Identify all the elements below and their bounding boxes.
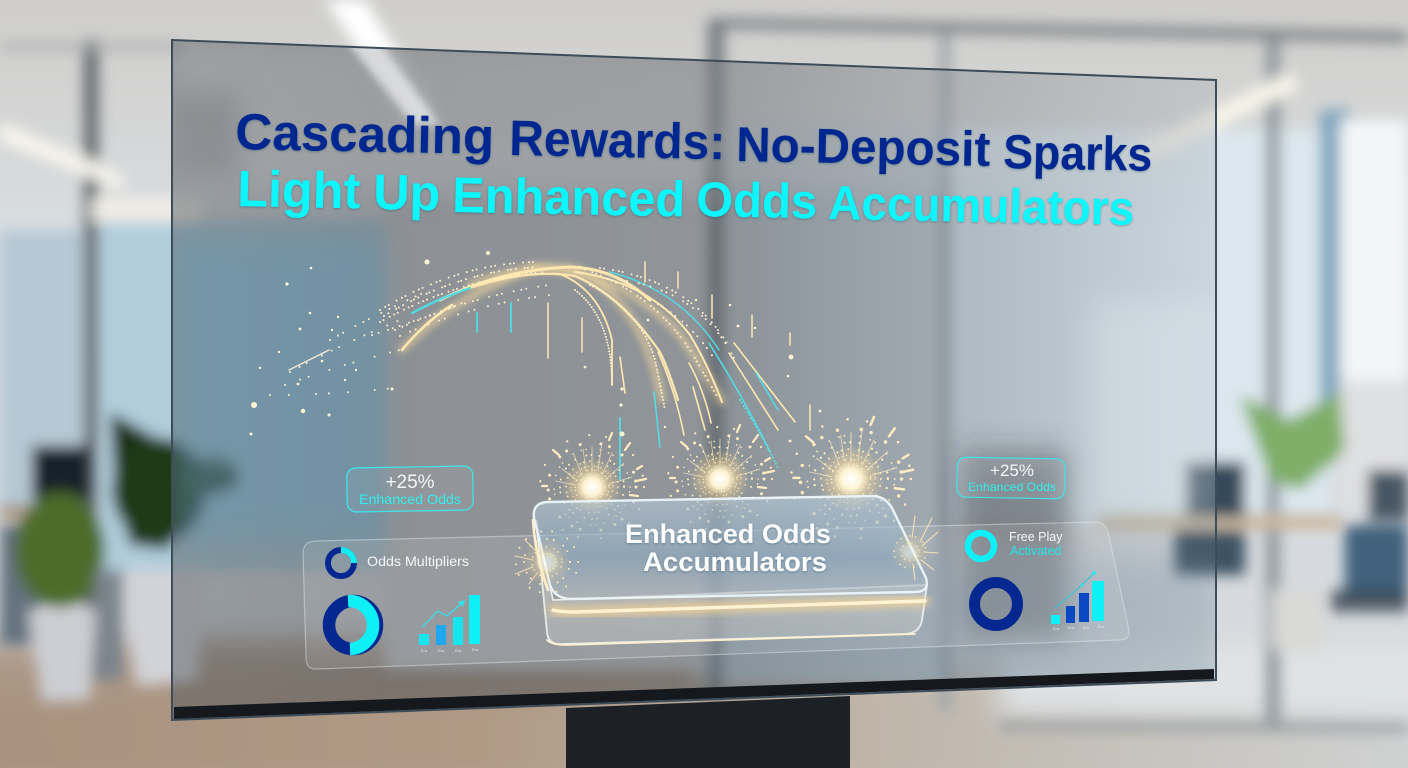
- ceiling lights: [325, 0, 440, 120]
- badge: right +25% enhanced odds: Enhanced Odds: [968, 480, 1056, 494]
- data panel: long glass tray behind the block: [303, 522, 1129, 669]
- chart: large donut: [329, 601, 377, 649]
- chart: rising bars: Era: [1053, 626, 1060, 631]
- dotted particle trails: [270, 262, 735, 410]
- burst: left: [540, 433, 646, 539]
- title line 1: Rewards:: [509, 110, 726, 170]
- glow under arcs: [402, 267, 722, 402]
- badge: left +25% enhanced odds: Enhanced Odds: [359, 492, 461, 507]
- chart: rising bars: Era: [472, 647, 479, 652]
- title line 2: Up: [373, 164, 441, 221]
- chart: rising bars: Era: [1083, 625, 1090, 630]
- mullions: [84, 40, 98, 680]
- title line 1: Cascading: [235, 103, 495, 165]
- left chair and desk: [32, 446, 90, 500]
- centre block: enhanced odds accumulators: [533, 496, 927, 645]
- title line 2: Light: [237, 160, 361, 219]
- loose glowing particles: [250, 251, 821, 446]
- icon: cyan ring: [968, 533, 994, 559]
- arcing spark streams: [270, 262, 810, 480]
- floor layer: [0, 640, 1408, 768]
- title line 2: [237, 160, 1135, 236]
- far-left window: [0, 230, 90, 510]
- right panel: free play activated: [968, 530, 1105, 631]
- burst: right: [791, 417, 913, 539]
- title: [235, 103, 1153, 236]
- monitor stand: [566, 696, 850, 768]
- badge: left +25% enhanced odds: +25%: [385, 472, 435, 493]
- left pots: [28, 608, 96, 702]
- block label: Enhanced Odds: [625, 519, 831, 549]
- chart: rising bars: Era: [421, 648, 428, 653]
- cyan streaks: [412, 272, 778, 452]
- block glow line: [533, 520, 925, 645]
- sparkler bursts above the block: [540, 417, 913, 539]
- block label: [625, 519, 831, 577]
- side spark: left of block: [515, 531, 578, 593]
- vertical falling sparks: [548, 262, 810, 430]
- panel: glass display screen: [172, 40, 1220, 720]
- label: free play: Free Play: [1009, 530, 1063, 544]
- badge: right +25% enhanced odds: [957, 457, 1065, 499]
- title line 1: Sparks: [1003, 126, 1153, 182]
- burst: centre: [668, 425, 774, 531]
- title line 1: [235, 103, 1153, 182]
- chart: rising bars: Era: [1068, 625, 1075, 630]
- icon: small donut: [328, 550, 354, 576]
- screen reflections and darker see-through zones: [172, 40, 1220, 690]
- title line 2: Accumulators: [828, 177, 1135, 236]
- chart: rising bars: [419, 595, 480, 653]
- title line 2: Enhanced: [452, 167, 686, 227]
- faint white trail at far left: [289, 350, 329, 370]
- chart: navy donut: [974, 582, 1018, 626]
- badge: right +25% enhanced odds: +25%: [990, 461, 1034, 480]
- title line 1: No-Deposit: [736, 118, 991, 177]
- label: odds multipliers: Odds Multipliers: [367, 554, 469, 569]
- chart: rising bars: Era: [438, 648, 445, 653]
- golden streaks along the arc: [402, 267, 795, 435]
- block lower slab: [536, 520, 927, 644]
- chart: rising bars: Era: [455, 648, 462, 653]
- side spark: right of block: [890, 516, 938, 580]
- chart: rising bars: Era: [1098, 624, 1105, 629]
- ceiling light seen through the screen: [345, 40, 440, 125]
- left panel: odds multipliers: [328, 550, 480, 653]
- chart: rising bars: [1051, 571, 1105, 631]
- right desk, chairs, plant: [1100, 514, 1340, 529]
- title line 2: Odds: [696, 173, 818, 229]
- block label: Accumulators: [643, 547, 827, 577]
- badge: left +25% enhanced odds: [347, 466, 473, 512]
- left plants: [15, 492, 105, 608]
- label: activated: Activated: [1010, 544, 1061, 558]
- block top face: [534, 496, 927, 599]
